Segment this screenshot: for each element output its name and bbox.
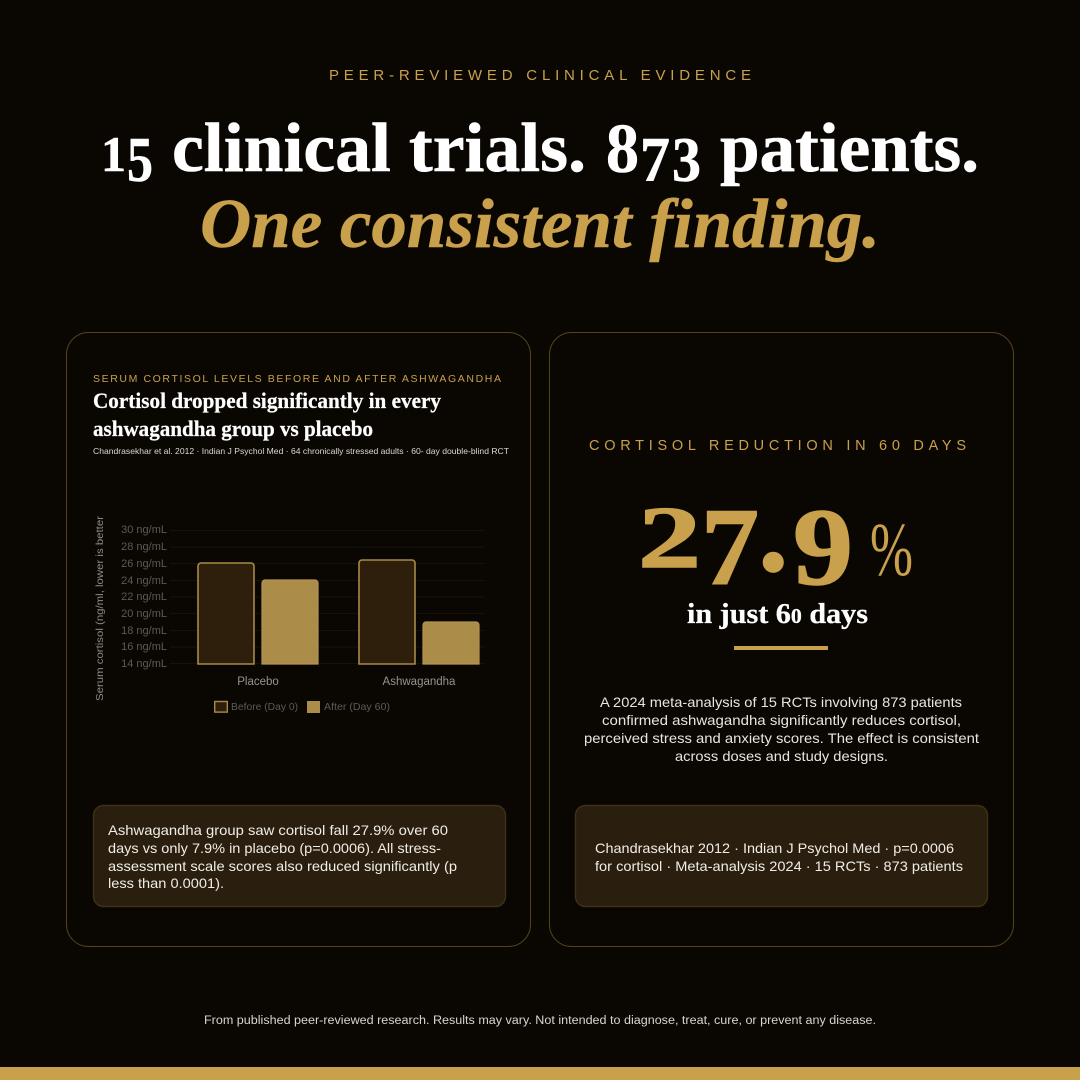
y axis labels: 16 ng/mL [121, 641, 167, 653]
stat description: confirmed ashwagandha significantly reduces cortisol, [602, 712, 961, 728]
stat description [584, 694, 979, 764]
chart heading: ashwagandha group vs placebo [93, 416, 373, 441]
panel outline [550, 332, 1014, 946]
divider rule [734, 646, 828, 650]
big number 27.9%: % [870, 508, 913, 592]
y axis labels: 20 ng/mL [121, 608, 167, 620]
bar: placebo after [262, 580, 318, 664]
stat description: perceived stress and anxiety scores. The effect is consistent [584, 730, 979, 746]
chart source: Chandrasekhar et al. 2012 · Indian J Psychol Med · 64 chronically stressed adults · 60- day double-blind RCT [93, 446, 509, 456]
title line 1: clinical trials. [172, 110, 586, 187]
x axis labels: Placebo [237, 676, 279, 688]
title line 1: 8 [606, 111, 639, 188]
title line 1: 5 [127, 124, 153, 195]
y axis labels: 14 ng/mL [121, 658, 167, 670]
title line 1 [101, 110, 979, 195]
stat eyebrow: CORTISOL REDUCTION IN 60 DAYS [589, 438, 966, 454]
y axis labels: 28 ng/mL [121, 541, 167, 553]
y axis labels: 26 ng/mL [121, 558, 167, 570]
title line 2: One consistent finding. [200, 186, 880, 263]
bar chart [95, 515, 485, 713]
panel: cortisol chart [66, 332, 530, 946]
title line 1: 1 [101, 126, 126, 182]
y axis labels: 18 ng/mL [121, 625, 167, 637]
y axis labels: 24 ng/mL [121, 575, 167, 587]
callout: citation: Chandrasekhar 2012 · Indian J Psychol Med · p=0.0006 [595, 840, 954, 856]
bar: ashwagandha before [359, 560, 415, 664]
bar: placebo before [198, 563, 254, 664]
callout: citation [576, 806, 988, 906]
eyebrow: peer-reviewed clinical evidence: PEER-REVIEWED CLINICAL EVIDENCE [329, 67, 751, 84]
stat description: A 2024 meta-analysis of 15 RCTs involving 873 patients [600, 694, 962, 710]
big number 27.9%: 7 [701, 486, 759, 608]
title line 1: 7 [640, 124, 670, 195]
callout: chart summary: less than 0.0001). [108, 875, 224, 891]
y axis labels [121, 524, 167, 670]
callout: citation: for cortisol · Meta-analysis 2024 · 15 RCTs · 873 patients [595, 858, 963, 874]
panel: key statistic [550, 332, 1014, 946]
legend: Before (Day 0) [231, 701, 298, 713]
big number 27.9%: 2 [638, 490, 701, 587]
chart eyebrow: SERUM CORTISOL LEVELS BEFORE AND AFTER ASHWAGANDHA [93, 373, 501, 385]
callout: chart summary: Ashwagandha group saw cortisol fall 27.9% over 60 [108, 822, 448, 838]
panel outline [66, 332, 530, 946]
big number 27.9%: 9 [793, 486, 853, 608]
big number 27.9%: . [757, 456, 790, 600]
title [101, 110, 979, 263]
chart heading [93, 388, 441, 441]
y axis labels: 30 ng/mL [121, 524, 167, 536]
callout: chart summary [94, 806, 506, 906]
legend [215, 701, 390, 713]
y axis title: Serum cortisol (ng/ml, lower is better [95, 515, 106, 701]
bottom gold bar [0, 1067, 1080, 1080]
y axis labels: 22 ng/mL [121, 591, 167, 603]
callout: chart summary: days vs only 7.9% in placebo (p=0.0006). All stress- [108, 840, 441, 856]
title line 1: 3 [672, 124, 701, 195]
chart heading: Cortisol dropped significantly in every [93, 388, 441, 413]
x axis labels: Ashwagandha [383, 676, 456, 688]
callout: chart summary: assessment scale scores also reduced significantly (p [108, 858, 457, 874]
stat subheading: in just 60 days [687, 598, 868, 630]
legend: After (Day 60) [324, 701, 390, 713]
title line 1: patients. [720, 110, 979, 187]
x axis labels [237, 676, 456, 688]
footer disclaimer: From published peer-reviewed research. Results may vary. Not intended to diagnose, treat, cure, or prevent any disease. [204, 1015, 876, 1027]
bar: ashwagandha after [423, 622, 479, 664]
big number 27.9% [638, 456, 913, 608]
stat description: across doses and study designs. [675, 748, 888, 764]
